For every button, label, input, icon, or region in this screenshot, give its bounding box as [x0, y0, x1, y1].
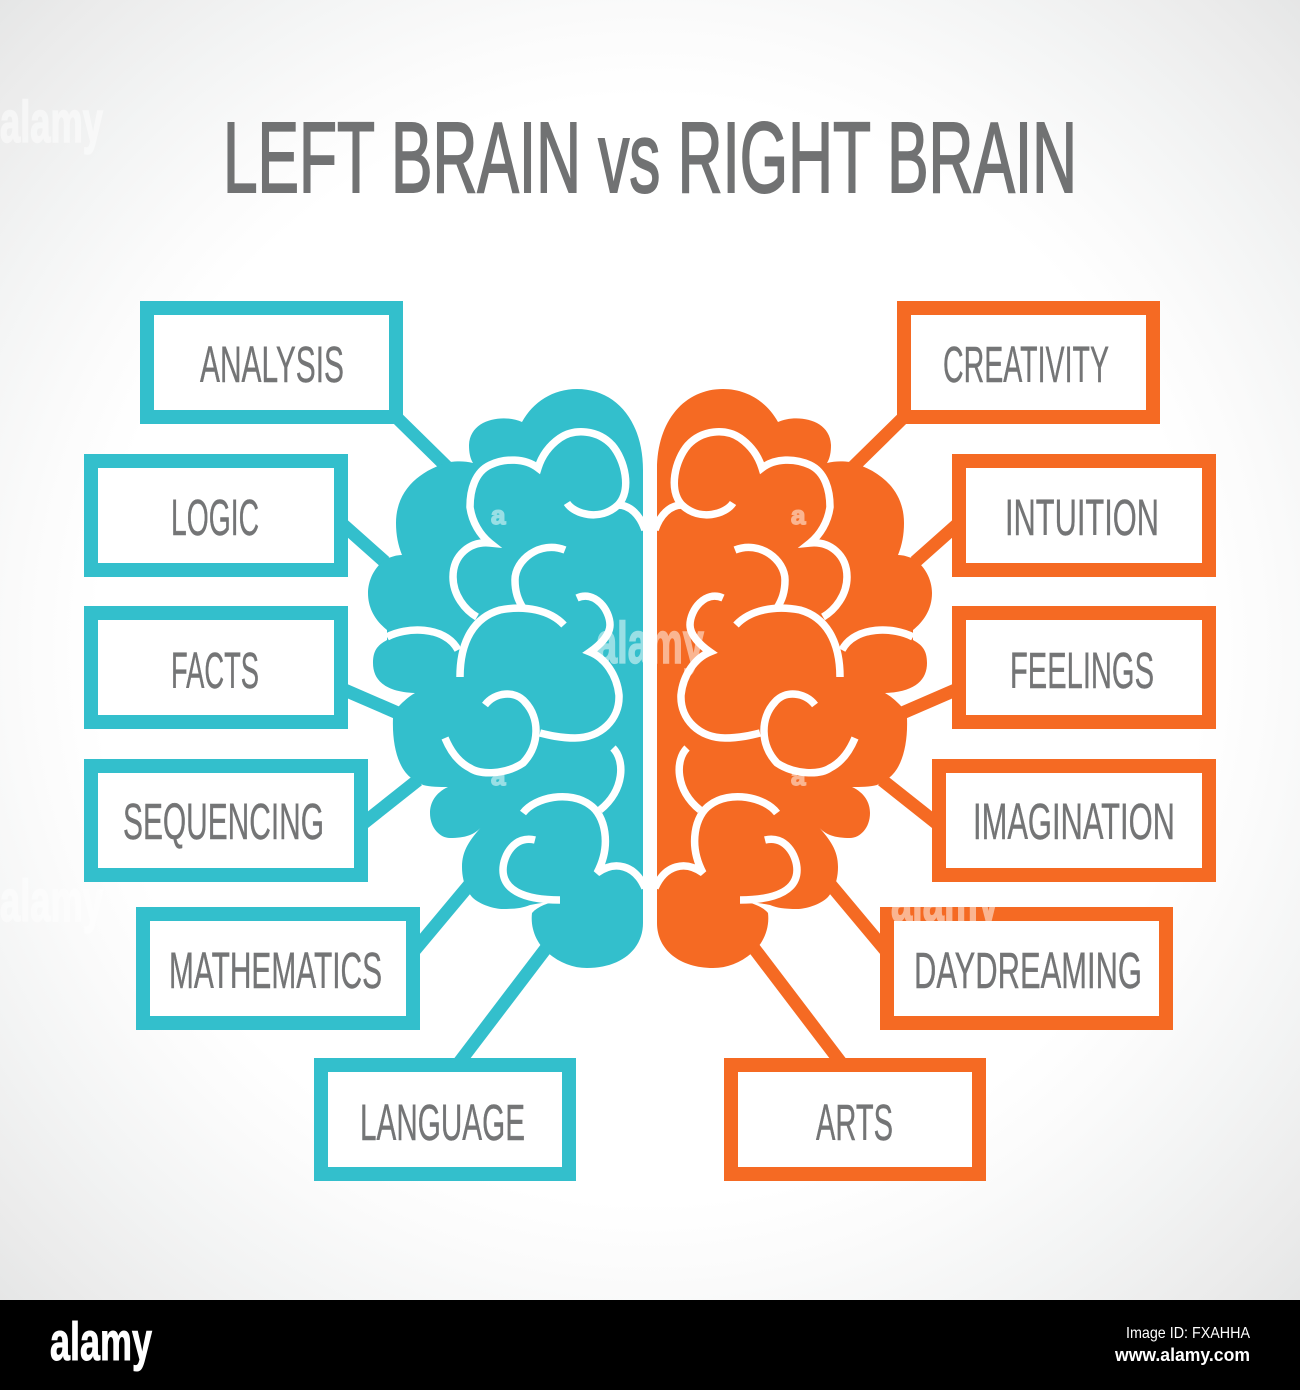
- right brain hemisphere: [655, 389, 932, 968]
- label box: creativity: CREATIVITY: [943, 336, 1109, 393]
- label box: sequencing: [91, 766, 361, 875]
- label box: imagination: IMAGINATION: [973, 793, 1175, 850]
- label box: feelings: [959, 613, 1209, 722]
- label box: logic: LOGIC: [171, 489, 259, 546]
- label box: mathematics: [143, 914, 413, 1023]
- label box: logic: [91, 461, 341, 570]
- watermarks: alamy: [0, 869, 103, 934]
- label box: arts: [731, 1065, 979, 1174]
- watermarks: a: [791, 500, 806, 530]
- label box: analysis: ANALYSIS: [200, 336, 344, 393]
- label box: facts: [91, 613, 341, 722]
- label box: analysis: [147, 308, 396, 417]
- footer logo: alamy: [50, 1312, 152, 1372]
- connectors: right brain: [750, 414, 960, 1064]
- left brain hemisphere: [368, 389, 645, 968]
- label box: daydreaming: DAYDREAMING: [914, 942, 1142, 999]
- watermarks: a: [791, 761, 806, 791]
- label box: intuition: [959, 461, 1209, 570]
- label box: language: [321, 1065, 569, 1174]
- label box: arts: ARTS: [816, 1094, 893, 1151]
- watermarks: alamy: [891, 869, 999, 934]
- watermarks: [0, 90, 999, 934]
- website: www.alamy.com: [1114, 1345, 1250, 1365]
- label box: creativity: [904, 308, 1153, 417]
- label box: daydreaming: [887, 914, 1166, 1023]
- connectors: left brain: [340, 414, 550, 1064]
- watermarks: a: [491, 761, 506, 791]
- image id: Image ID: FXAHHA: [1126, 1325, 1250, 1342]
- label box: imagination: [939, 766, 1209, 875]
- label box: intuition: INTUITION: [1005, 489, 1159, 546]
- footer bar: [0, 1300, 1300, 1390]
- label box: facts: FACTS: [171, 642, 259, 699]
- label box: sequencing: SEQUENCING: [123, 793, 324, 850]
- watermarks: a: [491, 500, 506, 530]
- watermarks: alamy: [0, 90, 103, 155]
- label box: language: LANGUAGE: [360, 1094, 525, 1151]
- watermarks: alamy: [596, 611, 704, 676]
- label box: feelings: FEELINGS: [1010, 642, 1154, 699]
- label box: mathematics: MATHEMATICS: [169, 942, 382, 999]
